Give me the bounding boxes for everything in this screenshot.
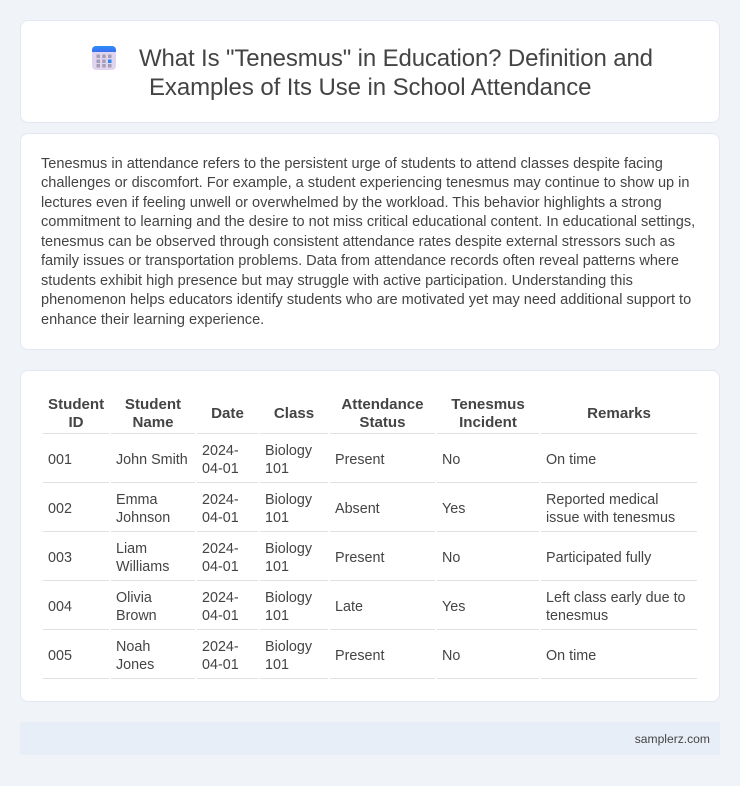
panel: attendance table: Status bbox=[359, 414, 406, 431]
panel: attendance table: 2024- bbox=[202, 541, 239, 557]
panel: attendance table: Biology bbox=[265, 443, 312, 459]
panel: attendance table: Tenesmus bbox=[451, 396, 525, 413]
panel: attendance table: Emma bbox=[116, 492, 157, 508]
icon: calendar bbox=[92, 46, 116, 70]
panel: description text: commitment to learning and the desire to not miss critical educational content. In educational settings, bbox=[41, 214, 695, 230]
panel: attendance table: Class bbox=[274, 405, 314, 422]
panel: attendance table: 101 bbox=[265, 461, 289, 477]
panel: attendance table: 101 bbox=[265, 559, 289, 575]
title bbox=[139, 45, 653, 101]
panel: description text bbox=[20, 133, 720, 350]
panel: attendance table: Name bbox=[132, 414, 174, 431]
panel: attendance table: 004 bbox=[48, 599, 72, 615]
panel: attendance table: No bbox=[442, 648, 460, 664]
panel: attendance table: tenesmus bbox=[546, 608, 608, 624]
panel: attendance table: Date bbox=[211, 405, 244, 422]
title: Examples of Its Use in School Attendance bbox=[149, 74, 591, 101]
panel: attendance table: Left class early due to bbox=[546, 590, 686, 606]
panel: attendance table: 04-01 bbox=[202, 510, 239, 526]
title: What Is "Tenesmus" in Education? Definition and bbox=[139, 45, 653, 72]
panel: attendance table: Late bbox=[335, 599, 363, 615]
panel: description text: phenomenon helps educators identify students who are motivated yet may need additional support to bbox=[41, 292, 691, 308]
panel: attendance table: Yes bbox=[442, 501, 465, 517]
panel: attendance table: Liam bbox=[116, 541, 147, 557]
panel: description text: challenges or discomfort. For example, a student experiencing tenesmus may continue to show up in bbox=[41, 175, 690, 191]
footer bbox=[20, 722, 720, 755]
panel: attendance table: John Smith bbox=[116, 452, 188, 468]
panel: attendance table: 002 bbox=[48, 501, 72, 517]
panel: attendance table: 2024- bbox=[202, 492, 239, 508]
panel: attendance table: Present bbox=[335, 550, 384, 566]
panel: attendance table: issue with tenesmus bbox=[546, 510, 675, 526]
panel: attendance table: 005 bbox=[48, 648, 72, 664]
panel: attendance table: On time bbox=[546, 452, 596, 468]
panel: description text: enhance their learning experience. bbox=[41, 312, 264, 328]
panel: attendance table: Yes bbox=[442, 599, 465, 615]
panel: description text: lectures even if feeling unwell or overwhelmed by the workload. This behavior highlights a strong bbox=[41, 195, 662, 211]
panel: attendance table: Biology bbox=[265, 492, 312, 508]
panel: attendance table: 04-01 bbox=[202, 559, 239, 575]
panel: attendance table: Reported medical bbox=[546, 492, 658, 508]
panel: attendance table: 101 bbox=[265, 510, 289, 526]
panel: description text: family issues or transportation problems. Data from attendance records often reveal patterns where bbox=[41, 253, 679, 269]
panel: attendance table: Biology bbox=[265, 590, 312, 606]
panel: attendance table: 04-01 bbox=[202, 657, 239, 673]
footer: samplerz.com bbox=[635, 732, 710, 746]
panel: attendance table: 101 bbox=[265, 657, 289, 673]
panel: attendance table: Williams bbox=[116, 559, 169, 575]
panel: attendance table: Brown bbox=[116, 608, 157, 624]
panel: attendance table: 04-01 bbox=[202, 461, 239, 477]
panel: attendance table: 2024- bbox=[202, 443, 239, 459]
panel: attendance table: 101 bbox=[265, 608, 289, 624]
panel: attendance table: ID bbox=[68, 414, 84, 431]
panel: attendance table: Participated fully bbox=[546, 550, 651, 566]
panel: attendance table: 2024- bbox=[202, 590, 239, 606]
panel: description text: Tenesmus in attendance refers to the persistent urge of students to attend classes despite facing bbox=[41, 156, 663, 172]
panel: attendance table: Student bbox=[48, 396, 104, 413]
panel: attendance table: Attendance bbox=[341, 396, 424, 413]
panel: attendance table: No bbox=[442, 550, 460, 566]
panel: attendance table: Biology bbox=[265, 639, 312, 655]
panel: attendance table: Jones bbox=[116, 657, 154, 673]
panel: attendance table: Johnson bbox=[116, 510, 170, 526]
panel: attendance table: 003 bbox=[48, 550, 72, 566]
panel: attendance table: On time bbox=[546, 648, 596, 664]
panel: attendance table: 04-01 bbox=[202, 608, 239, 624]
panel: description text: students exhibit high presence but may struggle with active participation. Understanding this bbox=[41, 273, 633, 289]
panel: attendance table: Olivia bbox=[116, 590, 152, 606]
panel: attendance table: 2024- bbox=[202, 639, 239, 655]
panel: title card bbox=[20, 20, 720, 123]
panel: attendance table: Noah bbox=[116, 639, 150, 655]
panel: attendance table: Absent bbox=[335, 501, 380, 517]
panel: attendance table: Incident bbox=[459, 414, 517, 431]
panel: description text: tenesmus can be observed through consistent attendance rates despite external stressors such as bbox=[41, 234, 675, 250]
panel: attendance table: 001 bbox=[48, 452, 72, 468]
panel: attendance table: Present bbox=[335, 648, 384, 664]
panel: attendance table: Remarks bbox=[587, 405, 651, 422]
panel: attendance table: Student bbox=[125, 396, 181, 413]
panel: attendance table: No bbox=[442, 452, 460, 468]
panel: attendance table: Biology bbox=[265, 541, 312, 557]
panel: attendance table bbox=[20, 370, 720, 702]
panel: attendance table: Present bbox=[335, 452, 384, 468]
